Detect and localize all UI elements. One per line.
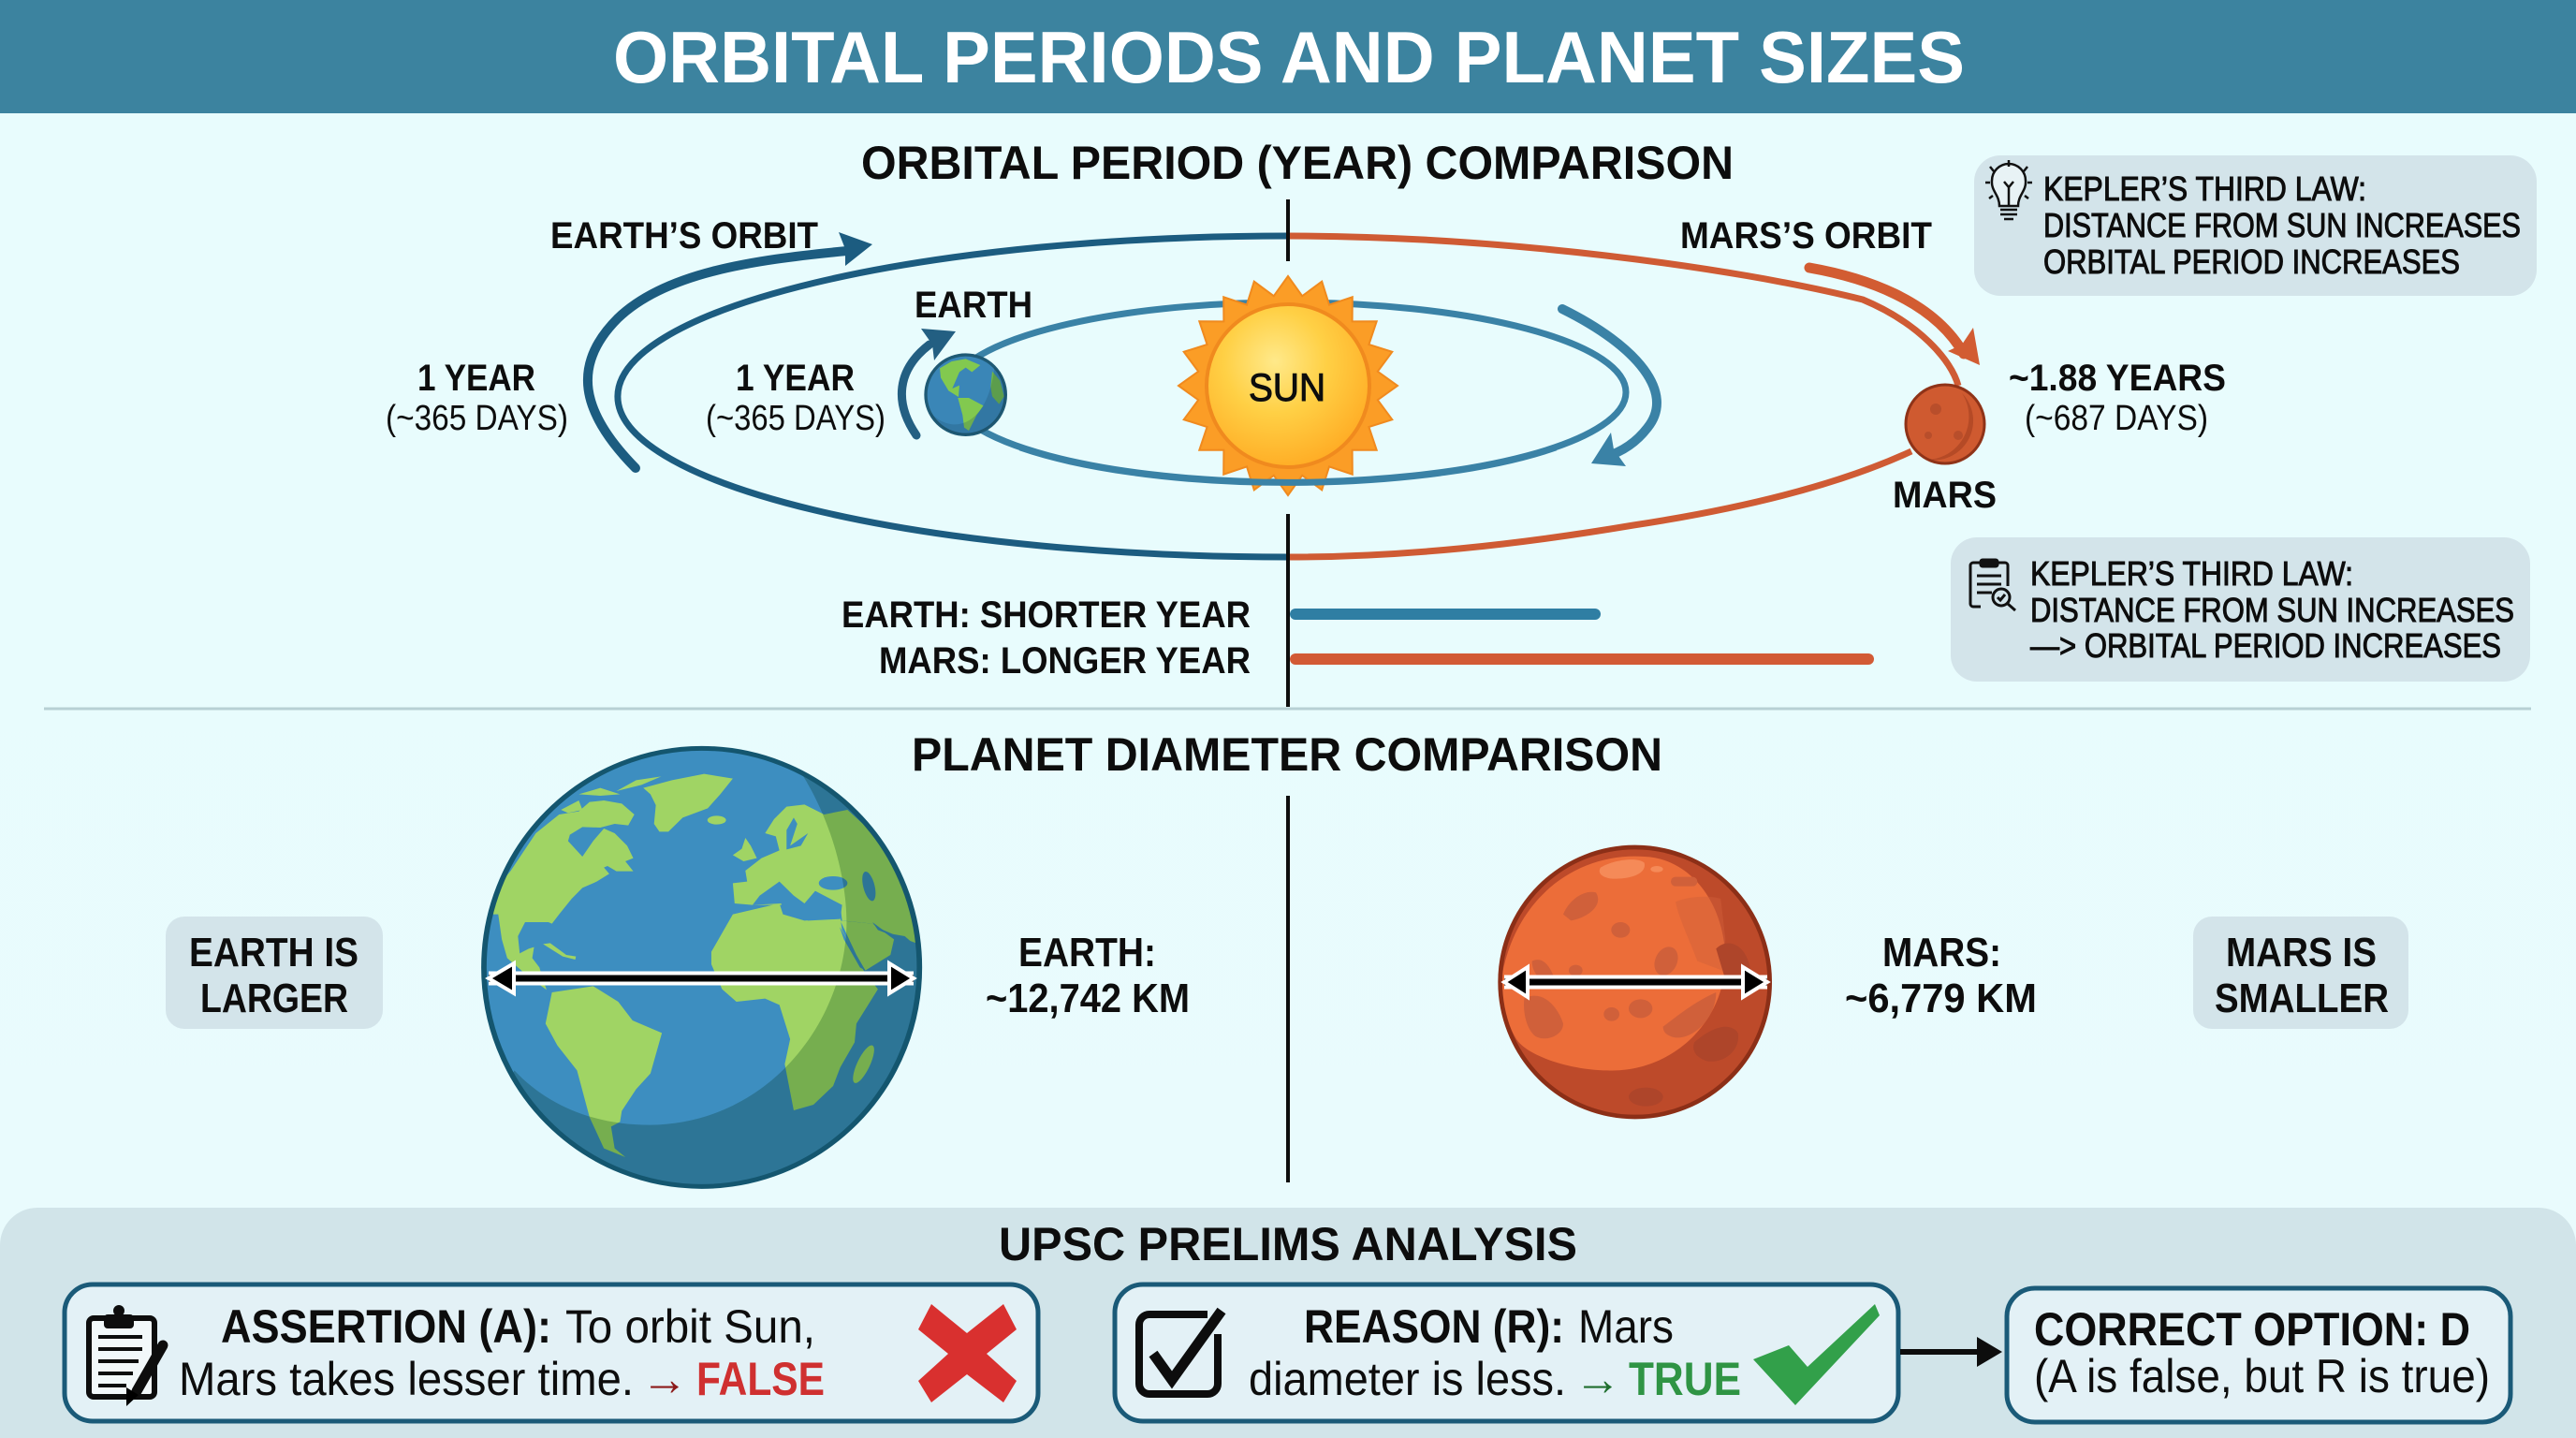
Mars orbit: lower right arc xyxy=(1288,451,1911,557)
box: assertion: Mars takes lesser time. xyxy=(179,1353,634,1405)
labels: Mars year: (~687 DAYS) xyxy=(2025,399,2208,438)
label: Earth diameter: EARTH: xyxy=(1018,930,1156,976)
heading: orbital period comparison: ORBITAL PERIOD (YEAR) COMPARISON xyxy=(861,137,1734,189)
icon: clipboard and pencil xyxy=(89,1305,163,1406)
small Mars xyxy=(1906,385,1984,463)
box: correct option: (A is false, but R is true) xyxy=(2034,1350,2490,1402)
South America xyxy=(546,986,662,1157)
badge: Earth is larger xyxy=(166,917,383,1029)
labels: Earth year, outer: 1 YEAR xyxy=(417,358,535,399)
Mars orbit: left arc xyxy=(618,236,1288,557)
box: assertion: To orbit Sun, xyxy=(565,1300,815,1353)
labels: orbit labels xyxy=(550,215,1997,516)
box: correct option: CORRECT OPTION: D xyxy=(2034,1303,2470,1356)
Madagascar xyxy=(853,1045,874,1083)
box: reason: Mars xyxy=(1578,1300,1674,1353)
box: assertion: ASSERTION (A): xyxy=(221,1300,551,1353)
label: Mars diameter xyxy=(1845,930,2037,1021)
box: assertion xyxy=(65,1284,1038,1421)
center divider xyxy=(1286,796,1290,1182)
arrow: inner orbit xyxy=(1562,309,1657,466)
sun: SUN xyxy=(1249,365,1325,409)
labels: orbit labels: MARS xyxy=(1893,475,1997,516)
callout: Kepler's third law with clipboard: —> ORBITAL PERIOD INCREASES xyxy=(2030,626,2501,665)
Eurasia xyxy=(733,804,923,946)
Mars orbit: upper right arc xyxy=(1288,236,1958,386)
label: Earth diameter xyxy=(986,930,1190,1021)
panel: UPSC prelims analysis xyxy=(0,1208,2576,1438)
label: Mars diameter: ~6,779 KM xyxy=(1845,976,2037,1021)
large Mars xyxy=(1499,845,1772,1119)
arrow: Mars's orbit xyxy=(1809,268,1980,365)
badge: Earth is larger: LARGER xyxy=(200,976,348,1021)
Arctic islands xyxy=(561,776,661,813)
labels: Mars year xyxy=(2009,358,2226,438)
badge: Mars is smaller xyxy=(2193,917,2408,1029)
badge: Mars is smaller: MARS IS xyxy=(2226,930,2377,976)
icon: green check xyxy=(1753,1304,1880,1405)
UK xyxy=(733,838,757,861)
arrow: to correct option xyxy=(1900,1337,2002,1367)
icon: light bulb xyxy=(1985,160,2032,219)
globe shadow xyxy=(513,776,917,1184)
labels: orbit labels: EARTH’S ORBIT xyxy=(550,215,818,257)
labels: Earth year, inner xyxy=(706,358,886,438)
heading: planet diameter comparison: PLANET DIAMETER COMPARISON xyxy=(912,728,1662,781)
box: reason xyxy=(1115,1284,1898,1421)
callout: Kepler's third law with clipboard xyxy=(1951,537,2530,682)
box: assertion: FALSE xyxy=(696,1353,825,1405)
badge: Earth is larger: EARTH IS xyxy=(189,930,359,976)
heading: UPSC prelims analysis: UPSC PRELIMS ANALYSIS xyxy=(999,1218,1577,1270)
callout: Kepler's third law with bulb xyxy=(1974,155,2537,296)
labels: Earth year, outer xyxy=(386,358,568,438)
axis line top xyxy=(1286,199,1290,261)
Cuba xyxy=(543,943,576,960)
box: correct option xyxy=(2007,1288,2510,1422)
box: reason: → xyxy=(1574,1353,1621,1405)
box: reason: diameter is less. xyxy=(1249,1353,1566,1405)
Earth orbit xyxy=(950,302,1626,482)
Africa xyxy=(711,903,878,1110)
Arabia xyxy=(841,920,894,971)
labels: orbit labels: EARTH xyxy=(915,285,1032,326)
comparison bars: EARTH: SHORTER YEAR xyxy=(842,594,1251,636)
small Earth xyxy=(924,353,1007,436)
Iceland xyxy=(708,815,726,825)
callout: Kepler's third law with bulb: KEPLER’S THIRD LAW: xyxy=(2043,169,2366,208)
box: reason: TRUE xyxy=(1629,1353,1741,1405)
title banner: ORBITAL PERIODS AND PLANET SIZES xyxy=(613,16,1965,98)
icon: clipboard with magnifier xyxy=(1970,560,2015,610)
Greenland xyxy=(643,774,733,831)
callout: Kepler's third law with clipboard: DISTANCE FROM SUN INCREASES xyxy=(2030,591,2514,629)
North America xyxy=(492,800,635,990)
box: reason: REASON (R): xyxy=(1304,1300,1564,1353)
labels: Mars year: ~1.88 YEARS xyxy=(2009,358,2226,399)
icon: red cross xyxy=(918,1304,1017,1402)
icon: checkbox xyxy=(1139,1311,1222,1394)
label: Earth diameter: ~12,742 KM xyxy=(986,976,1190,1021)
callout: Kepler's third law with clipboard: KEPLER’S THIRD LAW: xyxy=(2030,554,2353,593)
label: Mars diameter: MARS: xyxy=(1882,930,2001,976)
box: assertion: → xyxy=(641,1353,688,1405)
arrow: near Earth xyxy=(901,329,956,435)
arrow: outer Earth's orbit xyxy=(588,232,872,468)
sun xyxy=(1178,276,1398,495)
labels: Earth year, inner: (~365 DAYS) xyxy=(706,399,886,438)
comparison bars: MARS: LONGER YEAR xyxy=(879,640,1251,682)
orbit diagram xyxy=(588,199,1984,557)
large Earth globe xyxy=(481,745,923,1189)
labels: Earth year, outer: (~365 DAYS) xyxy=(386,399,568,438)
badge: Mars is smaller: SMALLER xyxy=(2215,976,2389,1021)
comparison bars xyxy=(842,514,1874,707)
diameter arrow: Earth xyxy=(489,963,914,993)
labels: orbit labels: MARS’S ORBIT xyxy=(1680,215,1932,257)
callout: Kepler's third law with bulb: ORBITAL PERIOD INCREASES xyxy=(2043,242,2460,281)
labels: Earth year, inner: 1 YEAR xyxy=(736,358,855,399)
title banner xyxy=(0,0,2576,113)
diameter arrow: Mars xyxy=(1504,967,1767,997)
Earth orbit front arc xyxy=(1020,448,1556,482)
